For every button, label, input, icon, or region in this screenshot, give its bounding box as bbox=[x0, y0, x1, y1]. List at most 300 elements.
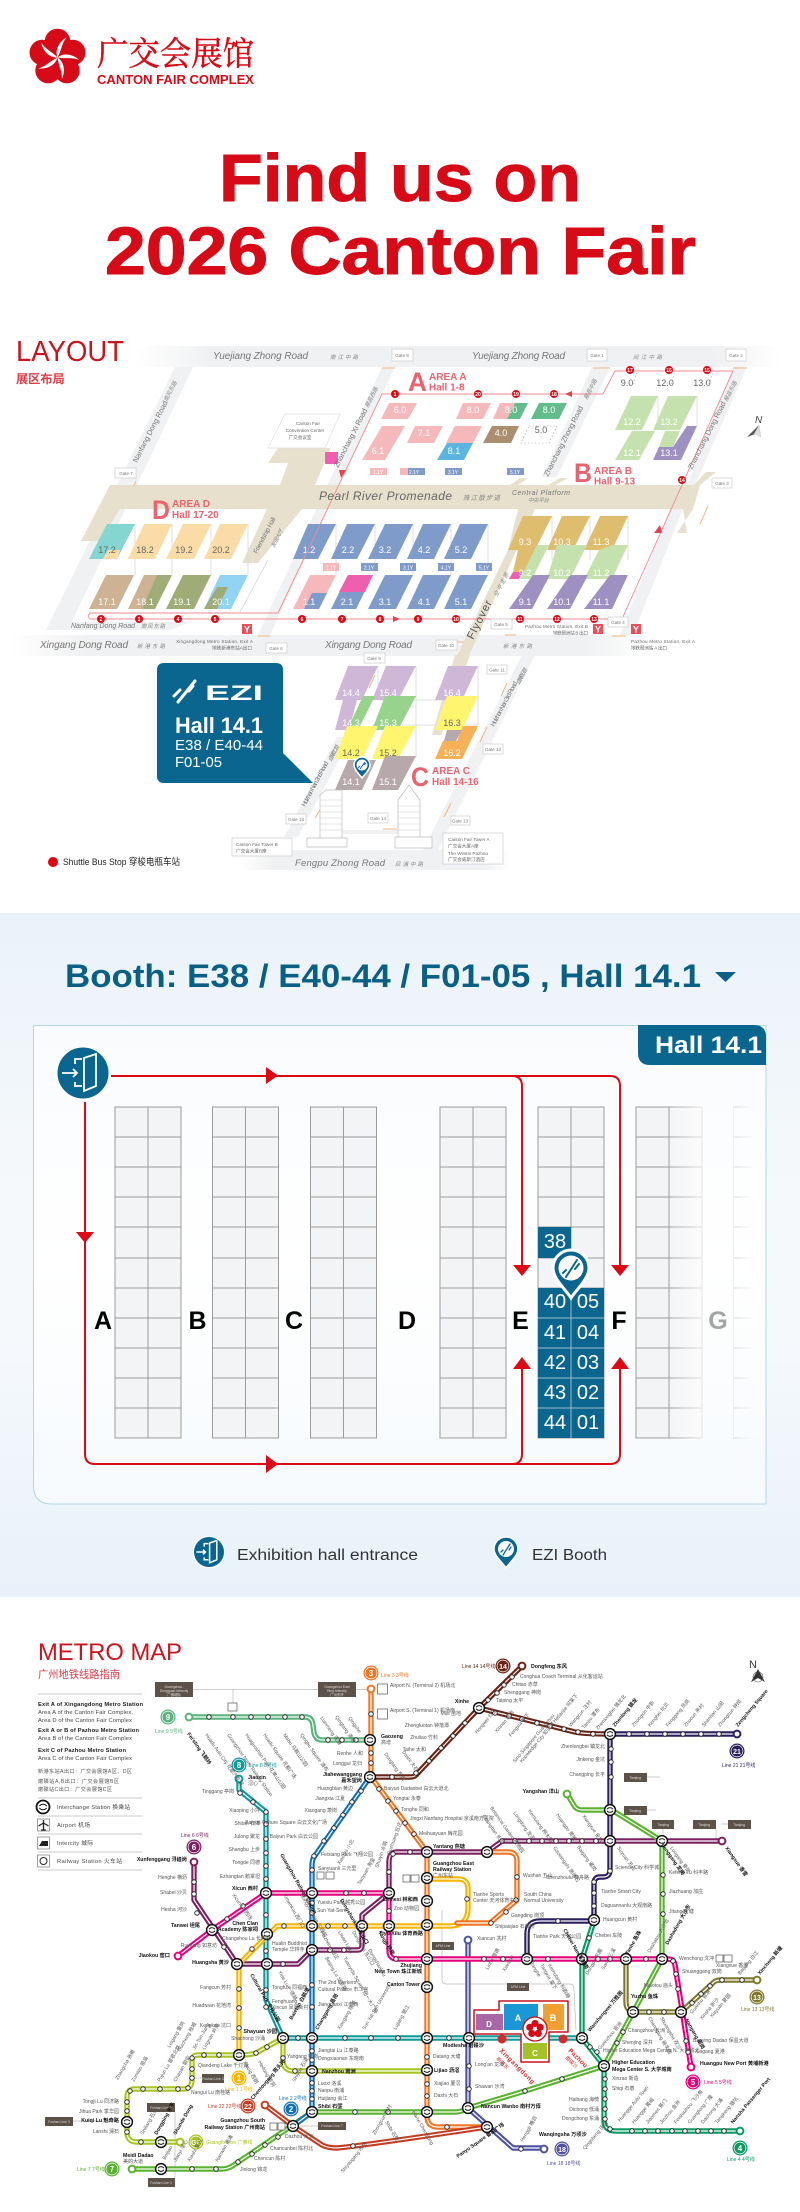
icon: north compass: N bbox=[755, 415, 763, 426]
layout heading bbox=[16, 336, 124, 386]
station labels rotated: Longgang 龙岗 bbox=[659, 1842, 687, 1876]
towers: 广交会大厦A座 bbox=[448, 842, 479, 850]
station labels rotated: Beijiao bbox=[162, 2145, 174, 2161]
line badges: Line 21 21号线 bbox=[722, 1762, 755, 1769]
station labels horizontal: Airport S. (Terminal 1) 机场南 bbox=[390, 1707, 455, 1714]
station labels rotated: Hetianjie 何棠下 bbox=[551, 1692, 580, 1724]
station labels rotated: Lingnan 岭南 bbox=[201, 2022, 221, 2051]
station labels rotated: Sun Yat-Sen University bbox=[362, 1983, 393, 2031]
metro heading bbox=[38, 1639, 182, 1681]
area a lower halls: 5.1Y bbox=[479, 566, 490, 572]
station labels rotated: Jiaomen 蕉门 bbox=[644, 2098, 669, 2125]
area d halls: 18.2 bbox=[136, 545, 154, 555]
shuttle bus route: 5 bbox=[214, 617, 217, 623]
station labels rotated: Tanhe 鱼珠 bbox=[623, 1928, 643, 1956]
gates: Gate 5 bbox=[494, 622, 508, 627]
station labels horizontal: Jiahewanggang bbox=[323, 1772, 362, 1778]
station labels horizontal: Wenchong 文冲 bbox=[679, 1955, 714, 1962]
station labels rotated: Wanshengwei 万胜围 bbox=[585, 1989, 625, 2033]
station labels rotated: Xicun Lu 西场 bbox=[230, 1892, 254, 1921]
callout text: Hall 14.1 bbox=[175, 713, 263, 738]
road labels: 南风东路 bbox=[163, 380, 179, 403]
intercity boxes: Foshan Line 3 bbox=[48, 2120, 70, 2124]
convention center: 广交会议室 bbox=[289, 434, 312, 441]
area labels: Hall 17-20 bbox=[172, 510, 219, 521]
station labels rotated: Leigang 雷岗 bbox=[167, 2021, 186, 2049]
panel: layout map bbox=[10, 336, 780, 870]
station labels horizontal: Dongfeng 东风 bbox=[531, 1662, 568, 1670]
station labels horizontal: 广州东站 bbox=[433, 1872, 453, 1879]
road labels: Flyover bbox=[465, 598, 495, 641]
station labels rotated: Shuangsha 双沙 bbox=[658, 2016, 682, 2051]
station labels horizontal: Xiaoping 小坪 bbox=[229, 1807, 260, 1814]
station labels horizontal: Kefeng Lu 科丰路 bbox=[669, 1869, 708, 1876]
line 8 bbox=[239, 1779, 582, 2038]
metro exits bbox=[176, 624, 696, 652]
station labels horizontal: Zhongluotan 钟落潭 bbox=[405, 1722, 449, 1729]
station labels horizontal: Jiangnanxi 江南西 bbox=[318, 2001, 358, 2008]
metro legend: Area A of the Canton Fair Complex, bbox=[38, 1710, 133, 1716]
station labels rotated: Dongtang 东塘 bbox=[382, 1751, 407, 1782]
gates: Gate 13 bbox=[452, 818, 469, 824]
area a lower halls: 5.1 bbox=[455, 597, 467, 607]
station labels rotated: Baigang 暹岗 bbox=[575, 1845, 597, 1873]
convention center: Convention Center bbox=[286, 428, 325, 433]
station labels rotated: Panyu Square 番禺广场 bbox=[455, 2121, 506, 2160]
station labels horizontal bbox=[79, 1662, 769, 2173]
station labels rotated: Xiashi 夏石 bbox=[187, 2138, 204, 2163]
shuttle bus route: 3 bbox=[138, 617, 141, 623]
area labels: Hall 14-16 bbox=[432, 777, 479, 788]
area b halls: 12.2 bbox=[623, 417, 641, 427]
station labels horizontal: Taihe 太和 bbox=[403, 1746, 426, 1753]
line badges: Line 22 22号线 bbox=[208, 2103, 241, 2110]
towers: Canton Fair Tower A bbox=[448, 837, 490, 842]
hall tab: Hall 14.1 bbox=[655, 1032, 762, 1059]
line 2 bbox=[293, 1777, 370, 2126]
station labels rotated: Pujun Lu 普君北路 bbox=[156, 2044, 182, 2083]
metro exits: 地铁琶洲站 A 出口 bbox=[631, 644, 667, 652]
station labels horizontal: Shawan 沙湾 bbox=[475, 2083, 504, 2090]
station labels horizontal: Yangshan 洋山 bbox=[523, 1787, 559, 1795]
station labels rotated: Fengxia 枫下 bbox=[507, 1711, 531, 1738]
area c halls: 14.4 bbox=[342, 688, 360, 698]
road labels: 新港东路 bbox=[503, 643, 532, 650]
station labels horizontal: Chen Clan bbox=[232, 1921, 258, 1927]
title: 2026 Canton Fair bbox=[105, 214, 696, 289]
area b halls: 9.0 bbox=[621, 378, 633, 388]
road labels: Huizhan Nan 3rd Road bbox=[490, 680, 519, 728]
station labels horizontal: Tinggang 亭岗 bbox=[202, 1788, 234, 1795]
intercity boxes: Tianjing bbox=[733, 1823, 745, 1827]
station labels horizontal: Xiangxue 香雪 bbox=[716, 1962, 748, 1969]
road labels: 友谊大厅 bbox=[270, 527, 286, 549]
gates: Gate 6 bbox=[269, 646, 283, 651]
station labels horizontal: Baiyun Park 白云公园 bbox=[270, 1833, 318, 1840]
station labels horizontal: Modiesha 磨碟沙 bbox=[443, 2041, 485, 2049]
station labels horizontal: Tongji Lu 同济路 bbox=[83, 2098, 119, 2105]
promenade and flyover bbox=[81, 428, 716, 735]
station labels horizontal: Long'an 龙潭 bbox=[475, 2061, 504, 2068]
area labels: Hall 1-8 bbox=[429, 382, 465, 394]
station labels horizontal: 嘉禾望岗 bbox=[341, 1776, 362, 1784]
area c halls: 15.1 bbox=[379, 777, 397, 787]
station labels rotated: Xinsha 新沙 bbox=[698, 1996, 721, 2021]
canton fair complex inset: Pazhou bbox=[567, 2047, 589, 2069]
station labels rotated: Zhangcha 张槎 bbox=[114, 2048, 137, 2081]
station labels horizontal: Miaotou 庙头 bbox=[644, 1982, 673, 1989]
station labels rotated bbox=[114, 1689, 784, 2174]
station labels horizontal: New Town 珠江新城 bbox=[375, 1967, 423, 1975]
area a lower halls: 4.1Y bbox=[441, 566, 452, 572]
station labels horizontal: Mega Center S. 大学城南 bbox=[612, 2065, 672, 2073]
area c halls: 14.3 bbox=[342, 718, 360, 728]
gates: Gate 7 bbox=[119, 471, 133, 476]
ezi booths: 04 bbox=[577, 1322, 599, 1344]
line badges: Line 18 18号线 bbox=[547, 2160, 580, 2167]
line badges: Line 4 4号线 bbox=[727, 2156, 755, 2163]
aisle letters: B bbox=[188, 1307, 207, 1335]
station labels rotated: Linhe 猎德 bbox=[484, 1947, 502, 1971]
header logo bbox=[30, 28, 255, 87]
area a lower halls: 4.1 bbox=[418, 597, 430, 607]
station labels rotated: Guicheng 桂城 bbox=[176, 2021, 198, 2053]
station labels rotated: Chentougang 陈头岗 bbox=[248, 2058, 287, 2101]
area a lower halls: 1.2 bbox=[303, 545, 315, 555]
aisle letters: F bbox=[611, 1307, 627, 1335]
station labels rotated: Dongshankou 东山口 bbox=[338, 1897, 371, 1946]
road labels: Zhanchang Dong Road bbox=[686, 400, 728, 471]
logo wordmark: EZI bbox=[205, 682, 263, 705]
station labels horizontal: Shuanggang 双岗 bbox=[682, 1969, 722, 1975]
station labels horizontal: Longgui 龙归 bbox=[333, 1760, 362, 1767]
area c halls: 15.4 bbox=[379, 688, 397, 698]
station labels horizontal: Hualin Buddhist bbox=[272, 1941, 308, 1947]
station labels horizontal: Jinkeng 金坑 bbox=[576, 1756, 605, 1763]
area a lower halls bbox=[293, 524, 492, 609]
station labels rotated: Yide Lu 一德路 bbox=[276, 1970, 299, 2002]
road labels: Zhanchang Zhong Road bbox=[542, 404, 585, 478]
station labels horizontal: Ruyifang 如意坊 bbox=[181, 1942, 217, 1949]
area b halls: 13.1 bbox=[660, 448, 678, 458]
station labels horizontal: Yangang 燕岗 bbox=[287, 2053, 318, 2060]
line badges: 13 bbox=[753, 1995, 761, 2002]
intercity boxes: Tianjing bbox=[657, 1823, 669, 1827]
hall tab bbox=[638, 1025, 766, 1065]
line badges: Guangfo Line 广佛线 bbox=[206, 2139, 252, 2146]
towers: 广交会大厦B座 bbox=[236, 848, 267, 854]
line badges: 5 bbox=[691, 2078, 696, 2087]
area c halls: 16.4 bbox=[443, 688, 461, 698]
aisle letters: D bbox=[398, 1307, 416, 1335]
station labels rotated: Tangxia 棠下 bbox=[538, 1962, 559, 1991]
legend: entrance bbox=[193, 1536, 418, 1568]
line badges: 4 bbox=[738, 2144, 743, 2153]
metro legend: Exit C of Pazhou Metro Station bbox=[38, 1748, 126, 1754]
aisle letters: E bbox=[512, 1307, 529, 1335]
area d halls: 20.1 bbox=[212, 597, 230, 607]
icon: metro compass bbox=[749, 1659, 765, 1682]
station labels rotated: Changban 长湴 bbox=[480, 1813, 506, 1845]
station labels horizontal: Normal University bbox=[524, 1898, 564, 1904]
area a upper halls: 5.1Y bbox=[510, 470, 521, 476]
terminal stations bbox=[129, 1663, 760, 2172]
towers: Canton Fair Tower B bbox=[236, 842, 278, 847]
metro exits: Xingangdong Metro Station, Exit A bbox=[176, 639, 254, 644]
towers bbox=[232, 785, 503, 864]
station labels horizontal: Zoo 动物园 bbox=[394, 1905, 419, 1912]
station labels horizontal: Jiangtai Lu 江泰路 bbox=[318, 2047, 359, 2054]
shuttle bus route: 11 bbox=[517, 617, 523, 623]
station labels rotated: Kemulang 柯木塱 bbox=[526, 1808, 554, 1844]
road labels: Pearl River Promenade bbox=[319, 489, 452, 503]
intercity boxes: 广州东环 bbox=[330, 1692, 344, 1697]
area c halls bbox=[335, 666, 478, 790]
shuttle bus route: 15 bbox=[704, 368, 710, 374]
station labels horizontal: Renhe 人和 bbox=[337, 1750, 363, 1757]
area a lower halls: 3.2 bbox=[379, 545, 391, 555]
area b halls: 10.1 bbox=[553, 597, 571, 607]
shuttle bus route: 14 bbox=[679, 478, 685, 484]
callout text: F01-05 bbox=[175, 754, 222, 771]
station labels horizontal: Shitan 石潭 bbox=[234, 1820, 260, 1827]
icon: booth pin bbox=[553, 1250, 589, 1298]
station labels horizontal: Dongchong 东涌 bbox=[562, 2115, 599, 2122]
station labels rotated: Dongshankou bbox=[366, 1948, 387, 1978]
station labels horizontal: Hesha 河沙 bbox=[161, 1906, 187, 1913]
station labels horizontal: Jiazhuang 加庄 bbox=[669, 1888, 703, 1895]
station labels horizontal: Railway Station 广州南站 bbox=[204, 2123, 266, 2131]
metro exits: Pazhou Metro Station, Exit B bbox=[525, 624, 588, 629]
shuttle bus route: 4 bbox=[177, 617, 180, 623]
station labels horizontal: Fangcun 芳村 bbox=[200, 1984, 231, 1991]
station labels horizontal: Tianhe Sports bbox=[473, 1892, 504, 1898]
metro exits: Y bbox=[244, 624, 250, 634]
area d halls bbox=[89, 524, 248, 609]
line badges: 8 bbox=[237, 1761, 242, 1770]
shuttle bus legend: Shuttle Bus Stop 穿梭电瓶车站 bbox=[63, 856, 180, 868]
station labels horizontal: Luoxi 洛溪 bbox=[318, 2080, 341, 2087]
callout: hall 14.1 bbox=[157, 663, 313, 783]
shuttle bus route bbox=[88, 366, 733, 623]
line badges: 22 bbox=[244, 2104, 252, 2111]
area b halls: 12.0 bbox=[656, 378, 674, 388]
road labels: Xingang Dong Road bbox=[39, 640, 128, 651]
line 21 bbox=[527, 1734, 737, 1959]
area b halls: 11.1 bbox=[593, 597, 609, 607]
area labels: AREA D bbox=[172, 499, 210, 510]
road labels: Yuejiang Zhong Road bbox=[213, 351, 308, 362]
shuttle bus route: 7 bbox=[341, 617, 344, 623]
station labels horizontal: Baiyun Culture Square 白云文化广场 bbox=[245, 1819, 327, 1826]
station labels rotated: Longdong 龙洞 bbox=[511, 1810, 536, 1842]
line badges: Line 14 14号线 bbox=[462, 1663, 495, 1670]
station labels horizontal: Temple 华林寺 bbox=[272, 1946, 305, 1953]
line badges: GF bbox=[191, 2140, 202, 2147]
ezi booths: 41 bbox=[544, 1322, 566, 1344]
station labels horizontal: Jiaoxin bbox=[248, 1775, 266, 1781]
area a upper halls: 8.0 bbox=[505, 405, 517, 415]
metro legend: Intercity 城际 bbox=[57, 1839, 93, 1847]
station labels rotated: Hedong 鹤洞 bbox=[256, 2060, 277, 2088]
ezi booths bbox=[538, 1227, 604, 1438]
road labels: 凤浦中路 bbox=[395, 861, 423, 868]
road labels: 新港东路 bbox=[137, 643, 165, 650]
station labels rotated: Hongwei 红卫 bbox=[473, 1707, 498, 1735]
hall frames bbox=[135, 396, 697, 758]
station labels rotated: Lujiang 鹭江 bbox=[392, 2004, 411, 2031]
area labels: D bbox=[152, 495, 170, 525]
area d halls: 19.2 bbox=[175, 545, 193, 555]
station labels horizontal: Huadiwan 花地湾 bbox=[192, 2002, 231, 2009]
gates: Gate 15 bbox=[288, 817, 305, 822]
intercity boxes: Foshan Line 3 bbox=[150, 2106, 172, 2110]
road labels: Friendship Hall bbox=[253, 516, 278, 555]
station labels rotated: Dashi 大石 bbox=[400, 1749, 420, 1773]
gates: Gate 2 bbox=[729, 353, 743, 358]
line badges: 18 bbox=[558, 2147, 566, 2154]
station labels rotated: Wangcun 汪村 bbox=[567, 1699, 593, 1728]
line badges: 6 bbox=[192, 1843, 197, 1852]
metro legend: Area B of the Canton Fair Complex bbox=[38, 1736, 132, 1742]
area a lower halls: 1.1Y bbox=[326, 566, 337, 572]
ezi booths: 38 bbox=[544, 1231, 566, 1253]
station labels horizontal: Wanqingsha 万顷沙 bbox=[539, 2131, 587, 2138]
station labels rotated: Taoyuan 淘金 bbox=[356, 1856, 377, 1886]
station labels rotated: Huadu Auto City 花都汽车城 bbox=[203, 1732, 245, 1787]
area a upper halls bbox=[362, 403, 567, 476]
station labels horizontal: Xiaogang 萧岗 bbox=[304, 1807, 337, 1814]
area a upper halls: 1.1Y bbox=[373, 470, 384, 476]
canton fair complex inset bbox=[474, 2001, 589, 2086]
station labels horizontal: Muli 亩地 bbox=[440, 1710, 461, 1717]
station labels rotated: Changgang 裕丰围 bbox=[646, 2016, 673, 2056]
area labels: AREA A bbox=[429, 372, 467, 383]
station labels rotated: Guangzhou North Railway Station bbox=[225, 1733, 274, 1798]
line 6 bbox=[194, 1841, 722, 1964]
station labels horizontal: Changshou Lu 长寿路 bbox=[222, 1935, 271, 1942]
station labels horizontal: Huijiang 会江 bbox=[318, 2095, 347, 2102]
station labels rotated: Zhucun 朱村 bbox=[682, 1702, 706, 1728]
station labels horizontal: Shayuan 沙园 bbox=[244, 2028, 277, 2035]
shuttle bus route: 20 bbox=[475, 392, 481, 398]
canton fair complex inset: 新港东 bbox=[495, 2055, 510, 2071]
station labels rotated: Zhongxin 中新 bbox=[630, 1699, 656, 1728]
station labels horizontal: Yantang 燕塘 bbox=[433, 1842, 465, 1850]
area labels: B bbox=[574, 458, 592, 488]
area a lower halls: 2.2 bbox=[342, 545, 354, 555]
stations bbox=[127, 1677, 742, 2169]
station labels rotated: Chaoan 朝安 bbox=[172, 2054, 192, 2083]
station labels rotated: Huadu Square 花都广场 bbox=[261, 1732, 298, 1780]
station labels horizontal: Daguannanlu 大观南路 bbox=[601, 1902, 652, 1909]
station labels horizontal: Tongde 同德 bbox=[232, 1859, 260, 1866]
metro legend: 磨碟站C出口：广交会展馆C区 bbox=[38, 1785, 112, 1793]
station labels horizontal: Huangcun 黄村 bbox=[603, 1916, 637, 1923]
station labels rotated: Jinzhou 金洲 bbox=[658, 2099, 682, 2125]
area d halls: 18.1 bbox=[136, 597, 154, 607]
line badges: 14 bbox=[499, 1664, 507, 1671]
station labels rotated: Qingtang 清塘 bbox=[333, 1714, 357, 1744]
roads bbox=[10, 346, 780, 870]
station labels horizontal: Tiyu Xilu 体育西路 bbox=[379, 1929, 424, 1937]
station labels horizontal: Zhujiang bbox=[400, 1963, 422, 1969]
gates: Gate 3 bbox=[715, 481, 729, 486]
station labels horizontal: Tianhe Smart City bbox=[601, 1889, 641, 1895]
station labels horizontal: Zhuliao 竹料 bbox=[410, 1734, 438, 1741]
intercity boxes: Tianjing bbox=[629, 1809, 641, 1813]
area d halls: 17.1 bbox=[98, 597, 116, 607]
area a upper halls: 8.1 bbox=[448, 446, 460, 456]
metro legend: Railway Station 火车站 bbox=[57, 1857, 122, 1865]
station labels horizontal: Dongxiaonan 东晓南 bbox=[318, 2055, 364, 2062]
intercity boxes bbox=[45, 1682, 751, 2187]
area a upper halls: 6.1 bbox=[372, 446, 384, 456]
station labels horizontal: Jiangxia 江夏 bbox=[315, 1795, 345, 1802]
metro exits: 地铁新港东站A出口 bbox=[212, 644, 252, 652]
station labels rotated: Fei'eling 飞鹅岭 bbox=[185, 1731, 214, 1767]
callout text bbox=[175, 713, 263, 771]
station labels rotated: Xiangxue 香雪 bbox=[723, 1845, 750, 1878]
line badges: 2 bbox=[289, 2105, 294, 2114]
road labels: Central Platform bbox=[512, 490, 570, 497]
station labels horizontal: Chebei 车陂 bbox=[595, 1932, 622, 1939]
station labels horizontal: Center 天河体育中心 bbox=[473, 1897, 519, 1904]
station labels horizontal: 滘心 bbox=[248, 1780, 258, 1787]
ezi booths: 43 bbox=[544, 1382, 566, 1404]
line 7 bbox=[132, 1794, 662, 2169]
station labels rotated: Feishazhou 飞沙角 bbox=[672, 2088, 705, 2125]
station labels rotated: Chebei Nan 车陂南 bbox=[561, 1927, 591, 1970]
station labels horizontal: Nanzhou 南洲 bbox=[322, 2067, 356, 2075]
interchange stations bbox=[122, 1703, 686, 2174]
towers: The Westin Pazhou bbox=[448, 851, 488, 856]
metro legend: Interchange Station 换乘站 bbox=[57, 1803, 130, 1811]
station labels rotated: Tanpu 潭布 bbox=[580, 1707, 602, 1730]
convention center bbox=[268, 414, 340, 464]
station labels rotated: Tanghe bbox=[528, 1961, 542, 1978]
road labels: 展昌东路 bbox=[723, 380, 739, 403]
area labels: C bbox=[411, 762, 429, 792]
area labels bbox=[152, 367, 636, 792]
station labels horizontal: Yongtai 永泰 bbox=[393, 1795, 421, 1802]
ezi booths: 05 bbox=[577, 1291, 599, 1313]
area b halls: 9.2 bbox=[519, 568, 531, 578]
station labels horizontal: Meidi Dadao bbox=[123, 2153, 154, 2159]
road labels: 展昌中路 bbox=[583, 378, 599, 401]
road labels: 展昌西路 bbox=[364, 386, 380, 409]
area c halls: 16.2 bbox=[443, 748, 461, 758]
area a upper halls: 3.1Y bbox=[448, 470, 459, 476]
station labels rotated: Huangge Auto Town bbox=[617, 2085, 650, 2123]
icon: ezi slashes bbox=[174, 681, 195, 702]
station labels rotated: Dongpu 东圃 bbox=[584, 1947, 604, 1976]
station labels rotated: Xincheng 新塘 bbox=[755, 1944, 784, 1976]
station labels rotated: Shuiyin 水荫 bbox=[373, 1840, 389, 1869]
area a upper halls: 7.1 bbox=[418, 428, 430, 438]
station labels horizontal: The 2nd Workers' bbox=[318, 1980, 357, 1986]
intercity boxes: Tianjing bbox=[629, 1776, 641, 1780]
station labels horizontal: Railway Station bbox=[433, 1867, 471, 1873]
station labels horizontal: Conghua Coach Terminal 从化客运站 bbox=[520, 1673, 603, 1680]
station labels rotated: Huangpo 黄陂 bbox=[554, 1812, 578, 1842]
intercity boxes: 广佛城际 bbox=[167, 1692, 181, 1697]
line 4 bbox=[582, 1921, 740, 2131]
road labels: Zhanchang Xi Road bbox=[332, 407, 369, 469]
station labels rotated: Kengbei 坑贝 bbox=[646, 1701, 671, 1728]
station labels rotated: Liwan Lake bbox=[336, 1930, 354, 1955]
station labels horizontal: Henghe 横沥 bbox=[158, 1874, 187, 1881]
